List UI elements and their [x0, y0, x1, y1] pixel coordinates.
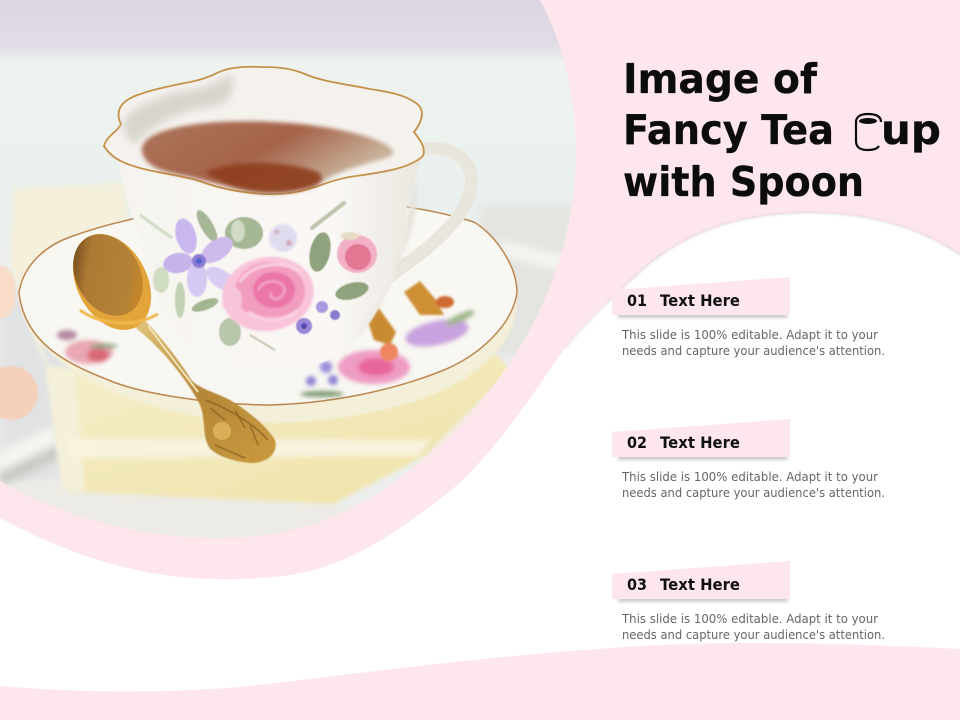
label ribbon 03: 03 [627, 575, 647, 594]
item 01 [612, 277, 885, 358]
spoon bowl [72, 234, 152, 330]
title: up [881, 106, 941, 154]
title: with Spoon [623, 158, 864, 206]
pink rosebud [337, 232, 377, 273]
label ribbon 01: Text Here [660, 291, 740, 310]
item 03 [612, 561, 885, 642]
photo background [0, 0, 580, 540]
description 01 [621, 328, 885, 358]
purple flower [162, 218, 234, 298]
leaves [140, 203, 370, 350]
cup rim and interior [104, 67, 424, 194]
description 02: This slide is 100% editable. Adapt it to your [621, 470, 878, 484]
bottom wave [0, 643, 960, 720]
description 03 [621, 612, 885, 642]
spoon [72, 234, 276, 464]
description 02 [621, 470, 885, 500]
label ribbon 03 [612, 561, 790, 602]
cup floral pattern [140, 203, 377, 350]
title: Image of [623, 55, 818, 103]
description 02: needs and capture your audience's attention. [622, 486, 885, 500]
item 02 [612, 419, 885, 500]
saucer [19, 199, 517, 423]
blurred table surface [0, 205, 580, 488]
label ribbon 03: Text Here [660, 575, 740, 594]
label ribbon 02: Text Here [660, 433, 740, 452]
description 01: This slide is 100% editable. Adapt it to your [621, 328, 878, 342]
wrapped amber candies [368, 281, 454, 361]
peach dots at left edge [0, 266, 38, 420]
small lilac flower [269, 224, 297, 252]
tea surface dark patch [205, 163, 322, 192]
spoon handle [132, 318, 276, 463]
tea [142, 121, 393, 193]
photo: fancy tea cup with spoon on saucer [0, 0, 580, 545]
napkin [10, 183, 508, 507]
cup body [119, 152, 424, 370]
icon: cup glyph in title [856, 114, 881, 150]
label ribbon 02: 02 [627, 433, 647, 452]
pink rose [221, 256, 315, 332]
saucer flowers [57, 308, 476, 397]
small violets [296, 301, 340, 334]
title [623, 55, 941, 206]
title: Fancy Tea [623, 106, 834, 154]
label ribbon 01: 01 [627, 291, 647, 310]
description 03: This slide is 100% editable. Adapt it to your [621, 612, 878, 626]
description 01: needs and capture your audience's attention. [622, 344, 885, 358]
cup handle [385, 149, 472, 280]
label ribbon 01 [612, 277, 790, 318]
label ribbon 02 [612, 419, 790, 460]
description 03: needs and capture your audience's attention. [622, 628, 885, 642]
